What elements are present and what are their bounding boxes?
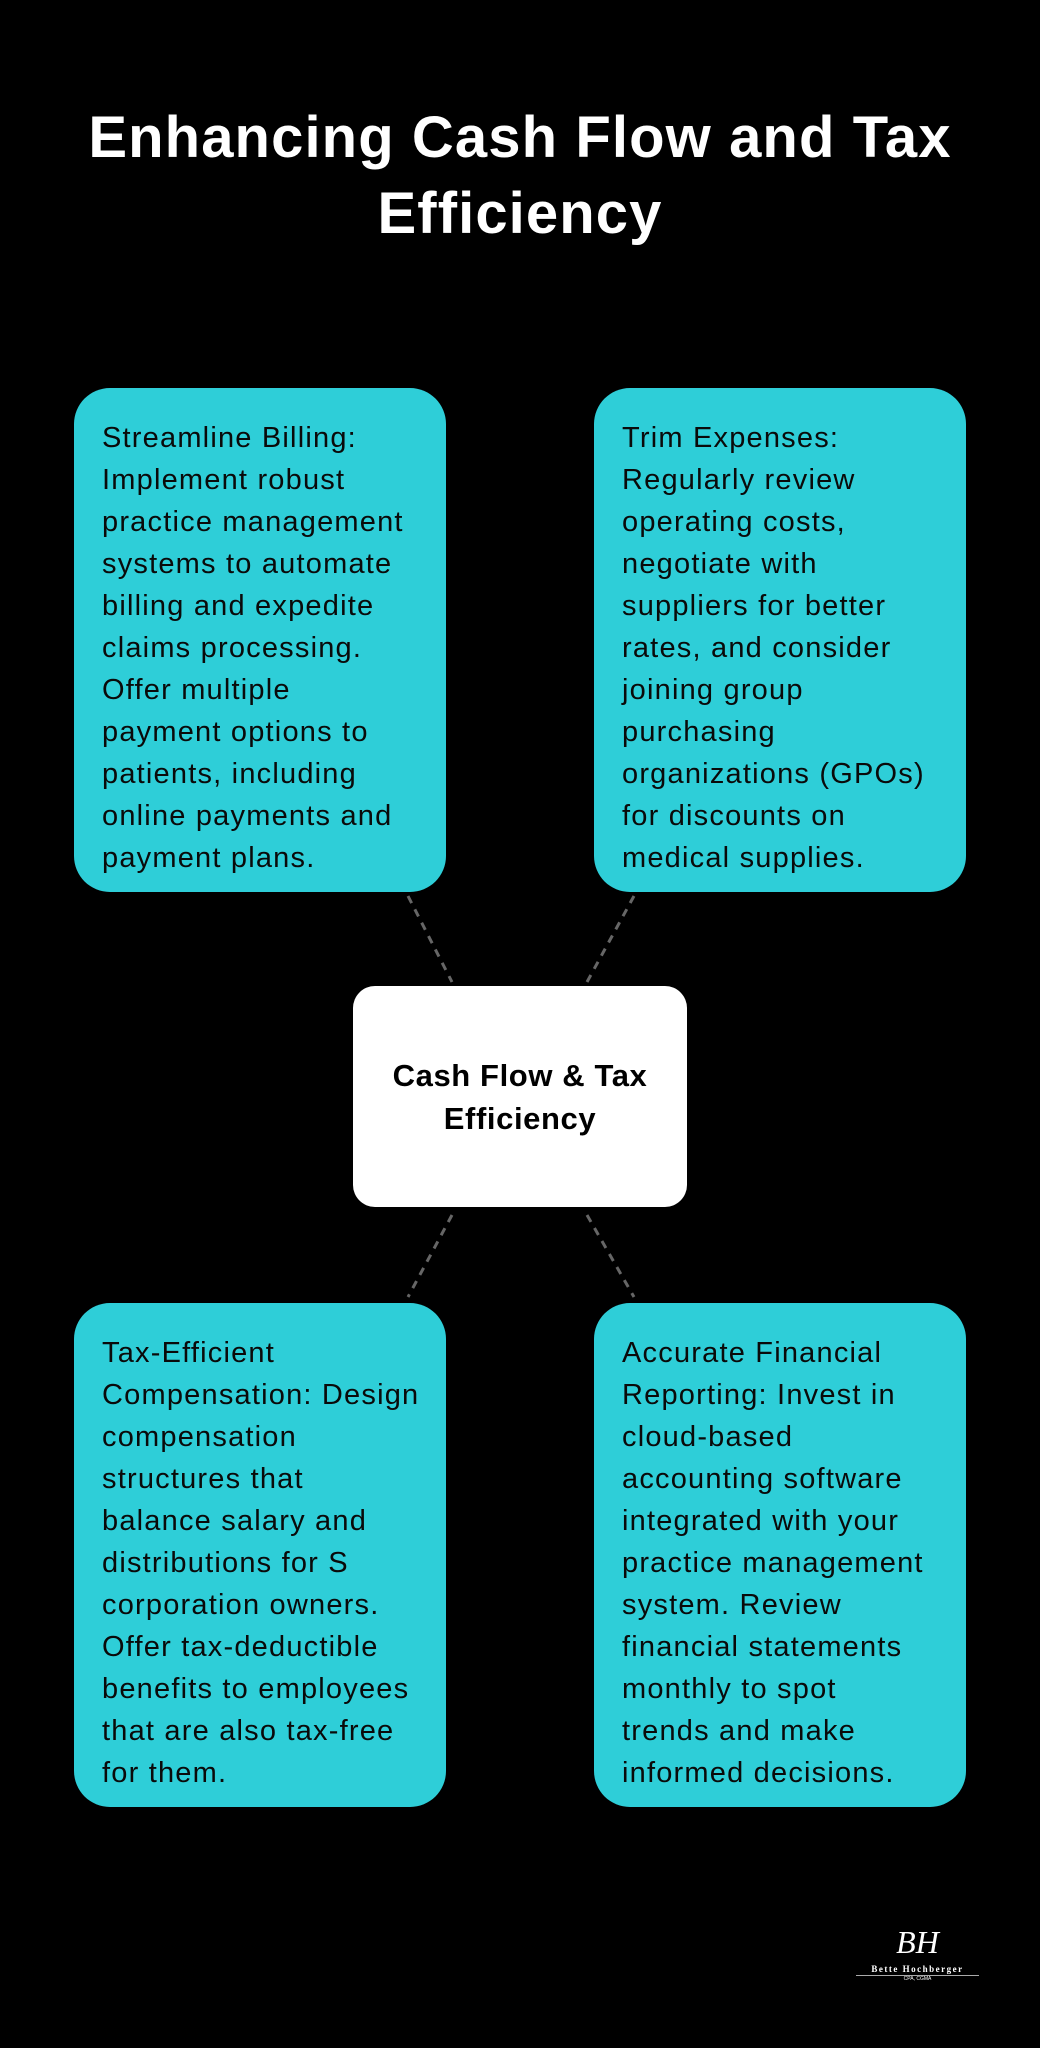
panel: trim expenses: organizations (GPOs) [622, 758, 925, 790]
title: Enhancing Cash Flow and Tax [88, 105, 952, 170]
panel: trim expenses: operating costs, [622, 506, 846, 538]
center node [353, 986, 687, 1207]
logo: BH [896, 1924, 939, 1960]
panel: accurate financial reporting: cloud-based [622, 1421, 793, 1453]
panel: accurate financial reporting: financial statements [622, 1631, 902, 1663]
panel: tax-efficient compensation: balance salary and [102, 1505, 367, 1537]
logo: Bette Hochberger [871, 1964, 964, 1974]
panel: trim expenses: Regularly review [622, 464, 856, 496]
panel: trim expenses [594, 388, 966, 892]
panel: streamline billing: claims processing. [102, 632, 362, 664]
panel: streamline billing: payment options to [102, 716, 369, 748]
panel: accurate financial reporting [594, 1303, 966, 1807]
panel: tax-efficient compensation: compensation [102, 1421, 297, 1453]
panel: accurate financial reporting: Reporting: Invest in [622, 1379, 896, 1411]
panel: streamline billing [74, 388, 446, 892]
panel: tax-efficient compensation: Offer tax-deductible [102, 1631, 379, 1663]
panel: accurate financial reporting: Accurate Financial [622, 1337, 882, 1369]
panel: tax-efficient compensation: structures that [102, 1463, 304, 1495]
panel: trim expenses: for discounts on [622, 800, 846, 832]
logo [856, 1924, 979, 1982]
panel: trim expenses: medical supplies. [622, 842, 865, 874]
panel: accurate financial reporting: system. Review [622, 1589, 842, 1621]
panel: accurate financial reporting: practice management [622, 1547, 924, 1579]
logo: CPA, CGMA [904, 1976, 931, 1982]
panel: trim expenses: Trim Expenses: [622, 422, 839, 454]
panel: trim expenses: joining group [622, 674, 804, 706]
panel: tax-efficient compensation: corporation owners. [102, 1589, 380, 1621]
panel: tax-efficient compensation: Tax-Efficient [102, 1337, 275, 1369]
center node: Efficiency [444, 1100, 596, 1136]
panel: trim expenses: rates, and consider [622, 632, 891, 664]
panel: streamline billing: Streamline Billing: [102, 422, 357, 454]
panel: accurate financial reporting: trends and make [622, 1715, 856, 1747]
panel: tax-efficient compensation: for them. [102, 1757, 227, 1789]
panel: accurate financial reporting: informed decisions. [622, 1757, 895, 1789]
title: Efficiency [378, 181, 662, 246]
panel: trim expenses: purchasing [622, 716, 776, 748]
panel: tax-efficient compensation: Compensation: Design [102, 1379, 419, 1411]
panel: trim expenses: negotiate with [622, 548, 818, 580]
panel: accurate financial reporting: integrated with your [622, 1505, 899, 1537]
title [88, 105, 952, 246]
panel: trim expenses: suppliers for better [622, 590, 886, 622]
panel: tax-efficient compensation: benefits to employees [102, 1673, 409, 1705]
panel: streamline billing: patients, including [102, 758, 357, 790]
panel: streamline billing: systems to automate [102, 548, 392, 580]
panel: streamline billing: practice management [102, 506, 404, 538]
panel: streamline billing: billing and expedite [102, 590, 374, 622]
panel: streamline billing: payment plans. [102, 842, 315, 874]
panel: streamline billing: Implement robust [102, 464, 345, 496]
panel: streamline billing: online payments and [102, 800, 392, 832]
panel: tax-efficient compensation: that are also tax-free [102, 1715, 394, 1747]
center node: Cash Flow & Tax [393, 1058, 647, 1092]
panel: tax-efficient compensation [74, 1303, 446, 1807]
panel: tax-efficient compensation: distributions for S [102, 1547, 349, 1579]
panel: accurate financial reporting: monthly to spot [622, 1673, 837, 1705]
panel: streamline billing: Offer multiple [102, 674, 291, 706]
panel: accurate financial reporting: accounting software [622, 1463, 903, 1495]
